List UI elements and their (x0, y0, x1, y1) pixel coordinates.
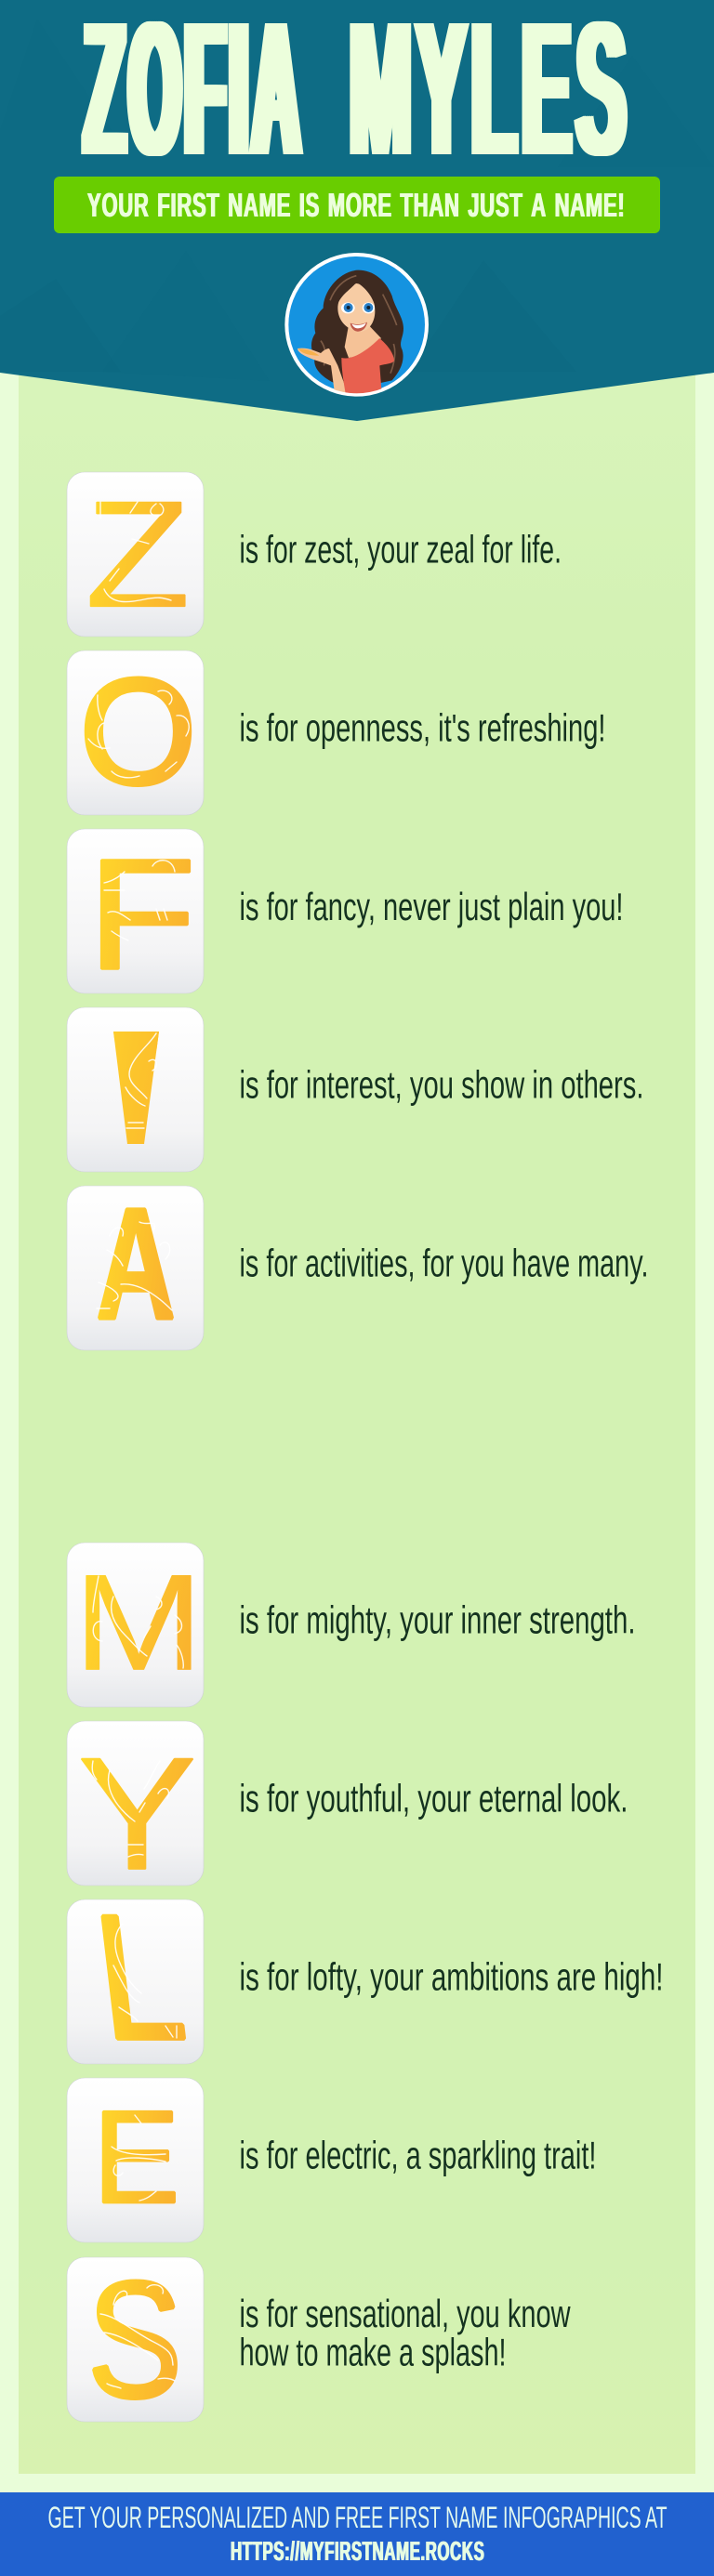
letter: I (113, 1032, 159, 1144)
card: L (67, 1899, 204, 2064)
description: S: how to make a splash! (240, 2331, 506, 2374)
card: I (67, 1007, 204, 1172)
panel: content background (19, 353, 695, 2474)
card: O (67, 651, 204, 815)
letter: I: I (65, 996, 205, 1178)
letter: Y: Y (78, 1724, 197, 1903)
tagline banner background (54, 177, 660, 233)
letter: L: L (86, 1878, 193, 2076)
letter: S: S (87, 2248, 182, 2433)
row: L (67, 1878, 664, 2076)
description: S: is for sensational, you know (240, 2292, 571, 2335)
row: M (67, 1543, 636, 1707)
row: F (67, 825, 623, 1003)
header: teal chevron banner (0, 0, 714, 421)
tagline: YOUR FIRST NAME IS MORE THAN JUST A NAME! (87, 186, 625, 224)
footer bar (0, 2492, 714, 2576)
card: S (67, 2257, 204, 2422)
footer url: HTTPS://MYFIRSTNAME.ROCKS (231, 2537, 484, 2567)
card: Y (67, 1721, 204, 1886)
row: A (67, 1176, 649, 1353)
card: F (67, 829, 204, 993)
letter: M: M (73, 1546, 204, 1699)
letter: Z: Z (86, 469, 191, 638)
row: Z (67, 469, 562, 638)
row: S (67, 2248, 571, 2433)
description: Z: is for zest, your zeal for life. (240, 528, 562, 572)
card: Z (67, 472, 204, 637)
avatar: cartoon woman in blue circle (286, 255, 427, 395)
row: Y (67, 1721, 628, 1903)
card: M (67, 1543, 204, 1707)
row: I (65, 996, 644, 1178)
row: O (67, 648, 606, 816)
letter: O: O (80, 648, 197, 816)
letter: F: F (87, 825, 196, 1003)
description: S (240, 2292, 571, 2374)
letter: E: E (93, 2083, 180, 2230)
row: E (67, 2078, 597, 2242)
letter: A: A (97, 1176, 176, 1353)
card: E (67, 2078, 204, 2242)
card: A (67, 1186, 204, 1350)
